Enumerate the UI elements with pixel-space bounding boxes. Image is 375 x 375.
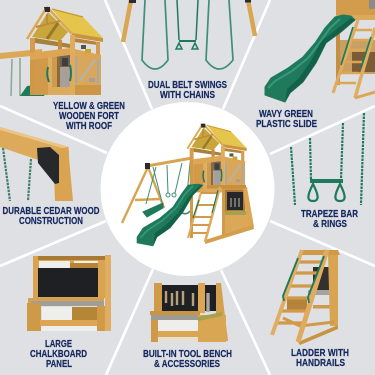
icon: swing beam and frame	[122, 158, 192, 223]
label: swings	[148, 80, 227, 101]
label: chalkboard: PANEL	[46, 359, 72, 370]
icon: center wavy slide	[137, 184, 203, 246]
icon: wooden fort with yellow roof	[27, 7, 103, 95]
label: ladder: HANDRAILS	[296, 358, 345, 369]
label: fort: WOODEN FORT	[59, 111, 119, 122]
label: trapeze: TRAPEZE BAR	[301, 209, 359, 220]
icon: tool bench	[150, 283, 228, 342]
panel: chalkboard	[27, 255, 111, 370]
label: trapeze	[301, 209, 359, 230]
label: cedar: DURABLE CEDAR WOOD	[2, 206, 100, 217]
panel: fort	[0, 7, 125, 132]
label: trapeze: & RINGS	[313, 219, 347, 230]
label: chalkboard	[30, 339, 87, 370]
icon: wavy green slide	[265, 15, 355, 102]
icon: lower tower and bench	[190, 160, 254, 244]
icon: slide top	[20, 85, 48, 96]
icon: fort upper	[187, 124, 247, 192]
label: cedar: CONSTRUCTION	[19, 216, 83, 227]
icon: belt swing right	[206, 0, 233, 69]
label: slide	[256, 109, 317, 130]
icon: trapeze bar and rings	[291, 113, 364, 205]
label: chalkboard: LARGE	[45, 339, 72, 350]
icon: tower and ladder	[333, 0, 375, 98]
icon: swing frame	[123, 0, 255, 42]
label: swings: WITH CHAINS	[160, 90, 215, 101]
label: swings: DUAL BELT SWINGS	[148, 80, 227, 91]
label: chalkboard: CHALKBOARD	[30, 349, 87, 360]
icon: ladder with handrails	[272, 250, 340, 345]
label: ladder: LADDER WITH	[291, 348, 349, 359]
icon: trapeze	[176, 0, 198, 49]
panel: center playset	[100, 102, 274, 276]
label: cedar	[2, 206, 100, 227]
panel: swings	[123, 0, 255, 101]
icon: center ladder	[188, 187, 220, 242]
panel: cedar wood	[0, 127, 100, 227]
label: fort: YELLOW & GREEN	[53, 101, 125, 112]
icon: swings and rings	[143, 162, 190, 217]
icon: wood beam with black bracket	[0, 127, 73, 201]
panel: slide	[256, 0, 375, 130]
panel: ladder	[272, 250, 349, 369]
label: fort	[53, 101, 125, 132]
label: fort: WITH ROOF	[66, 121, 112, 132]
panel: trapeze	[291, 113, 364, 230]
white center circle	[100, 102, 274, 276]
label: slide: PLASTIC SLIDE	[256, 119, 317, 130]
label: slide: WAVY GREEN	[259, 109, 313, 120]
icon: belt swing left	[142, 0, 168, 69]
icon: swing beam with chains	[0, 49, 42, 96]
label: tool bench: & ACCESSORIES	[154, 359, 220, 370]
icon: bench with chalkboard	[27, 255, 111, 331]
label: ladder	[291, 348, 349, 369]
label: tool bench: BUILT-IN TOOL BENCH	[143, 349, 232, 360]
label: tool bench	[143, 349, 232, 370]
icon: chains	[3, 148, 31, 201]
panel: tool bench	[143, 283, 232, 370]
